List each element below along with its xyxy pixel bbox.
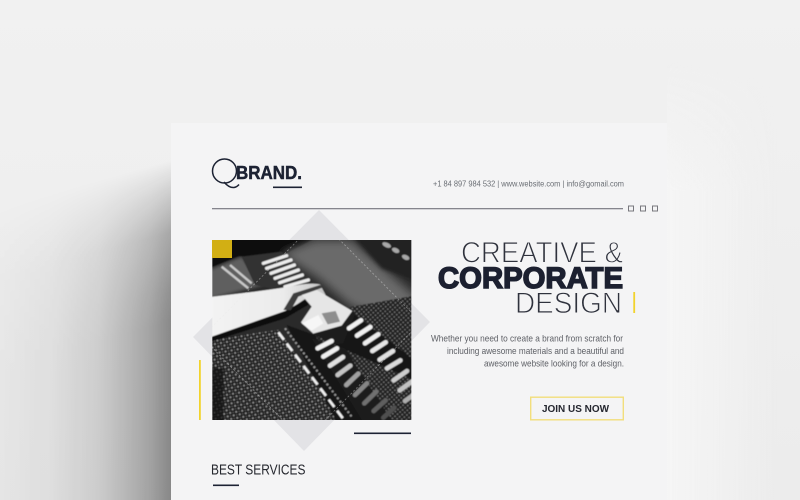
yellow side bar — [199, 360, 201, 420]
zipper tape — [288, 326, 362, 420]
zipper slider — [301, 290, 352, 334]
stitching — [278, 332, 343, 419]
headline line 2: CORPORATE — [438, 262, 623, 295]
logo wordmark: BRAND. — [236, 163, 302, 183]
flyer mockup scene — [0, 158, 677, 500]
headline line 1: CREATIVE & — [461, 236, 623, 270]
right fabric dots — [316, 296, 412, 420]
paper shadow — [10, 168, 171, 500]
background — [676, 189, 677, 190]
yellow corner square — [212, 240, 232, 258]
headline — [438, 236, 623, 320]
zipper pull — [205, 284, 326, 341]
button: join us now: JOIN US NOW — [542, 404, 609, 415]
section heading: best services: BEST SERVICES — [211, 462, 306, 478]
lower left fabric dots — [212, 329, 335, 420]
lower zipper teeth left row — [318, 341, 394, 418]
dark top band — [212, 240, 312, 267]
header rule — [212, 208, 623, 209]
yellow headline accent — [633, 292, 635, 313]
headline line 3: DESIGN — [515, 287, 622, 320]
top right corner — [356, 240, 403, 275]
logo underline — [273, 186, 302, 188]
header squares — [628, 206, 658, 211]
upper zipper teeth — [263, 256, 308, 287]
lower zipper teeth right row — [349, 320, 413, 401]
photo base — [212, 240, 412, 378]
section heading underline — [213, 484, 239, 486]
grey diamond behind photo — [193, 210, 430, 451]
photo: zipper close-up — [212, 240, 412, 420]
body paragraph: including awesome materials and a beautiful and — [447, 346, 624, 356]
icon: logo Q ring — [212, 159, 239, 188]
contact details: +1 84 897 984 532 | www.website.com | info@gomail.com — [433, 180, 624, 188]
photo underline — [354, 432, 411, 434]
body paragraph: awesome website looking for a design. — [484, 358, 624, 368]
button: join us now — [531, 397, 623, 420]
logo — [212, 159, 302, 188]
upper left fabric — [212, 256, 261, 297]
body paragraph — [431, 334, 624, 368]
flyer paper — [171, 123, 667, 500]
dashed diamond outline over photo — [212, 240, 411, 420]
blurred upper right fabric — [278, 240, 412, 308]
body paragraph: Whether you need to create a brand from scratch for — [431, 334, 623, 344]
